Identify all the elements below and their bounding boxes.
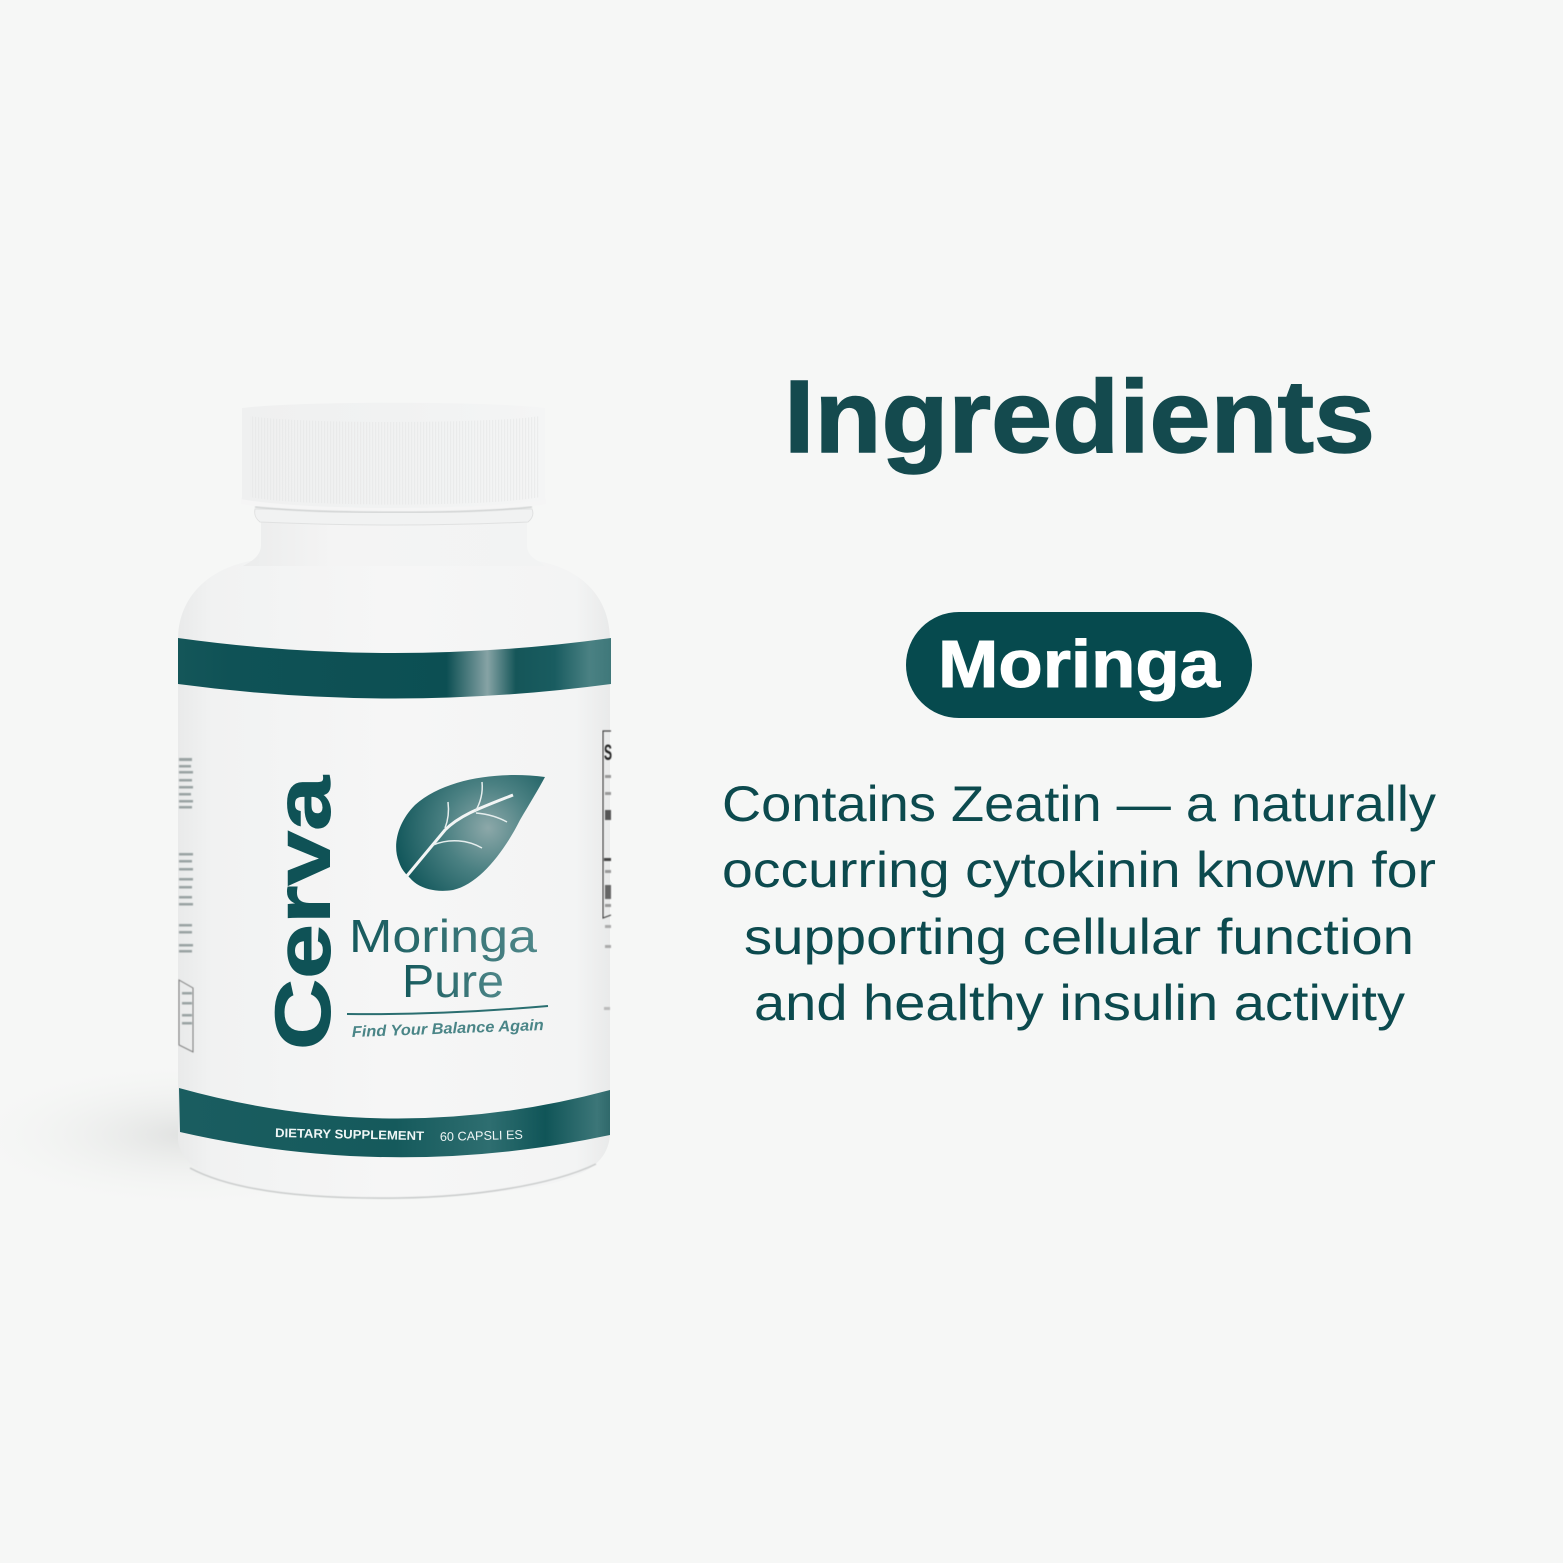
neck ring [255, 509, 533, 525]
product name [349, 910, 537, 1007]
description text [722, 775, 1437, 1031]
band text: DIETARY SUPPLEMENT [275, 1126, 425, 1143]
tagline: Find Your Balance Again [352, 1017, 544, 1041]
ingredient pill: Moringa [938, 627, 1221, 702]
description text: occurring cytokinin known for [722, 841, 1436, 898]
description text: Contains Zeatin — a naturally [722, 775, 1437, 832]
bottom band [179, 1088, 610, 1157]
bottle neck [243, 520, 545, 566]
band text: 60 CAPSLI ES [440, 1128, 523, 1144]
title: Ingredients [784, 359, 1375, 474]
leaf icon [396, 775, 545, 891]
product name: Moringa [349, 910, 537, 962]
bottle cap [241, 403, 546, 512]
bottle body [178, 561, 610, 1198]
band text [275, 1126, 523, 1144]
top band [178, 638, 611, 698]
brand name: Cerva [258, 775, 346, 1050]
product bottle [0, 403, 612, 1210]
description text: supporting cellular function [744, 908, 1414, 965]
description text: and healthy insulin activity [754, 974, 1406, 1031]
ingredient pill [906, 612, 1252, 718]
product bottle: S [604, 740, 612, 765]
side label text [179, 758, 193, 1052]
product name: Pure [402, 955, 504, 1007]
